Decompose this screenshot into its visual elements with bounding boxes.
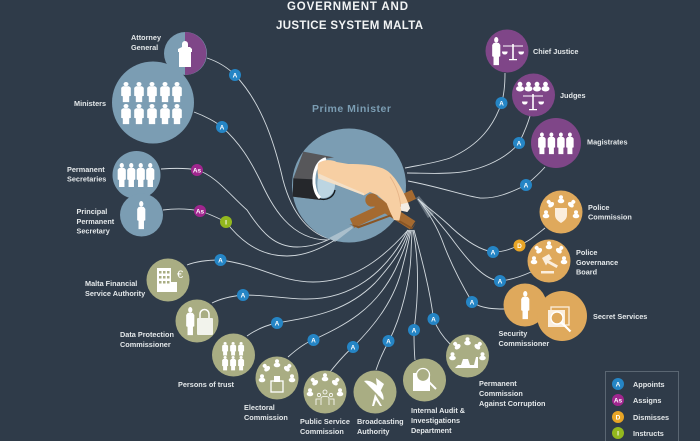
- label: Attorney: [131, 33, 162, 42]
- label: Authority: [357, 427, 390, 436]
- label: Electoral: [244, 403, 275, 412]
- label: Police: [576, 248, 598, 257]
- badges on connectors: A: [241, 292, 246, 300]
- badges on connectors: A: [275, 320, 280, 328]
- hand holding cross: [293, 152, 416, 229]
- node: Permanent Commission Against Corruption: [446, 334, 545, 408]
- node: Chief Justice: [486, 30, 578, 72]
- title: JUSTICE SYSTEM MALTA: [276, 20, 423, 32]
- node: Police Governance Board: [528, 240, 618, 282]
- label: Secretary: [76, 226, 111, 236]
- node: Police Commission: [540, 190, 632, 234]
- badges on connectors: A: [311, 338, 316, 344]
- badges on connectors: As: [193, 168, 202, 174]
- legend: I: [617, 430, 619, 438]
- legend: As: [614, 398, 623, 404]
- badges on connectors: A: [218, 258, 223, 264]
- badges on connectors: A: [233, 72, 238, 80]
- label: Commission: [479, 389, 523, 398]
- node: Malta Financial Service Authority: [85, 258, 190, 302]
- label: Commission: [300, 427, 344, 436]
- legend: D: [616, 414, 621, 422]
- badges on connectors: A: [386, 338, 391, 346]
- label: Police: [588, 203, 610, 212]
- label: Against Corruption: [479, 399, 545, 408]
- badges on connectors: A: [431, 316, 436, 324]
- label: Data Protection: [120, 330, 174, 339]
- node: Electoral Commission: [244, 356, 298, 422]
- label: Magistrates: [587, 138, 628, 146]
- label: Chief Justice: [533, 47, 578, 56]
- legend: Appoints: [633, 380, 665, 389]
- node: Secret Services: [537, 291, 647, 341]
- badges on connectors: As: [196, 208, 205, 216]
- node: Internal Audit & Investigations Department: [403, 358, 466, 435]
- label: Persons of trust: [178, 380, 235, 389]
- label: Board: [576, 268, 597, 276]
- label: Commissioner: [120, 340, 171, 349]
- title: GOVERNMENT AND: [287, 1, 408, 13]
- badges on connectors: A: [412, 328, 417, 334]
- legend: A: [616, 382, 621, 388]
- label: Governance: [576, 258, 618, 267]
- legend: [606, 372, 678, 441]
- badges on connectors: A: [470, 300, 475, 306]
- node: Ministers: [74, 62, 194, 144]
- node: Persons of trust: [178, 334, 255, 389]
- node: Magistrates: [531, 118, 628, 168]
- node: Data Protection Commissioner: [120, 300, 218, 349]
- circle: [292, 128, 406, 242]
- label: Secret Services: [593, 312, 647, 321]
- badges on connectors: D: [517, 243, 522, 250]
- label: Malta Financial: [85, 279, 137, 288]
- label: Public Service: [300, 417, 350, 426]
- label: Principal: [76, 207, 107, 216]
- node: Attorney General: [131, 32, 207, 75]
- badges on connectors: [191, 69, 532, 353]
- label: Broadcasting: [357, 417, 404, 426]
- label: Permanent: [479, 379, 517, 388]
- badges on connectors: A: [491, 250, 496, 256]
- label: Internal Audit &: [411, 406, 466, 415]
- label: Service Authority: [85, 289, 146, 298]
- node: Permanent Secretaries: [67, 151, 160, 199]
- badges on connectors: A: [351, 344, 356, 352]
- badges on connectors: A: [499, 100, 504, 108]
- legend: Instructs: [633, 429, 664, 438]
- label: General: [131, 43, 158, 52]
- node: Malta Financial Service Authority: €: [177, 269, 183, 281]
- badges on connectors: A: [524, 182, 529, 190]
- heading: Prime Minister: Prime Minister: [312, 103, 391, 115]
- label: Commission: [244, 413, 288, 422]
- label: Judges: [560, 91, 586, 100]
- connector lines: [161, 58, 545, 372]
- label: Investigations: [411, 416, 460, 425]
- legend: Assigns: [633, 396, 661, 405]
- node: Broadcasting Authority: [354, 370, 404, 436]
- node: Public Service Commission: [300, 370, 350, 436]
- node: Judges: [512, 74, 586, 116]
- node: Security Commissioner: [498, 284, 549, 348]
- label: Permanent: [67, 165, 105, 174]
- label: Department: [411, 426, 452, 435]
- node: Principal Permanent Secretary: [76, 194, 163, 236]
- label: Ministers: [74, 99, 106, 108]
- badges on connectors: A: [220, 124, 225, 132]
- badges on connectors: I: [225, 220, 227, 226]
- label: Security: [498, 329, 528, 338]
- label: Permanent: [76, 217, 115, 226]
- label: Commissioner: [498, 339, 549, 348]
- label: Commission: [588, 212, 632, 222]
- panel: Prime Minister: [292, 103, 434, 242]
- cross beam rays: [329, 196, 434, 242]
- badges on connectors: A: [498, 278, 503, 286]
- label: Secretaries: [67, 174, 106, 184]
- badges on connectors: A: [517, 140, 522, 148]
- legend: Dismisses: [633, 413, 669, 422]
